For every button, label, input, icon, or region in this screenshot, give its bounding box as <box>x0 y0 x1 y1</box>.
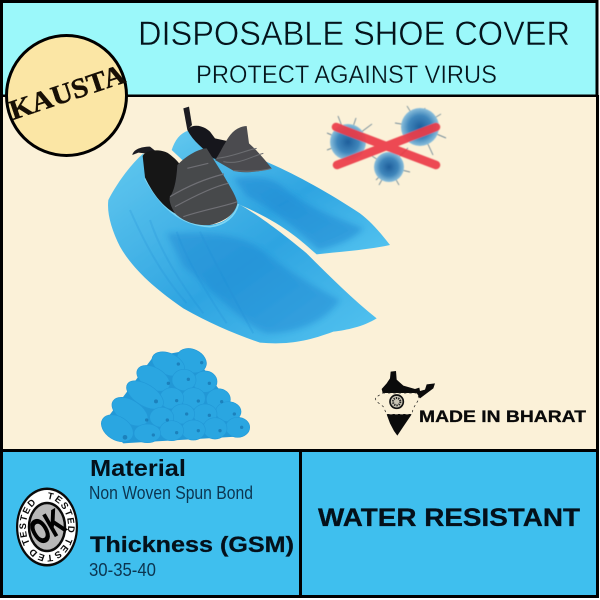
icon: tested OK stamp: TESTED TESTED TESTED <box>19 492 75 562</box>
icon: virus crossed out <box>327 106 446 185</box>
product photo: shoe covers <box>108 107 390 343</box>
panel: water resistant: WATER RESISTANT <box>318 504 580 532</box>
panel: header <box>2 2 597 96</box>
panel: water resistant <box>302 451 597 596</box>
icon: tested OK stamp: OK <box>23 502 72 553</box>
back shoe <box>183 107 272 172</box>
heading: material: Material <box>90 455 186 481</box>
logo badge: KAUSTA <box>5 36 130 156</box>
front shoe <box>132 147 237 225</box>
front shoe cover <box>108 153 377 343</box>
back shoe cover <box>172 131 390 254</box>
frame lines <box>2 95 598 450</box>
heading: thickness: Thickness (GSM) <box>90 532 294 557</box>
product photo: pile of rolled covers <box>96 344 250 447</box>
panel: product area <box>3 97 597 450</box>
text: thickness value: 30-35-40 <box>89 560 156 580</box>
subtitle: PROTECT AGAINST VIRUS <box>196 61 497 89</box>
logo badge: KAUSTA: KAUSTA <box>5 59 130 127</box>
title: DISPOSABLE SHOE COVER <box>138 15 570 53</box>
label: made in Bharat: MADE IN BHARAT <box>419 407 587 426</box>
panel: material and thickness <box>3 452 299 595</box>
bottom frame lines <box>0 450 599 597</box>
icon: India map <box>375 371 435 436</box>
text: material value: Non Woven Spun Bond <box>89 483 253 503</box>
